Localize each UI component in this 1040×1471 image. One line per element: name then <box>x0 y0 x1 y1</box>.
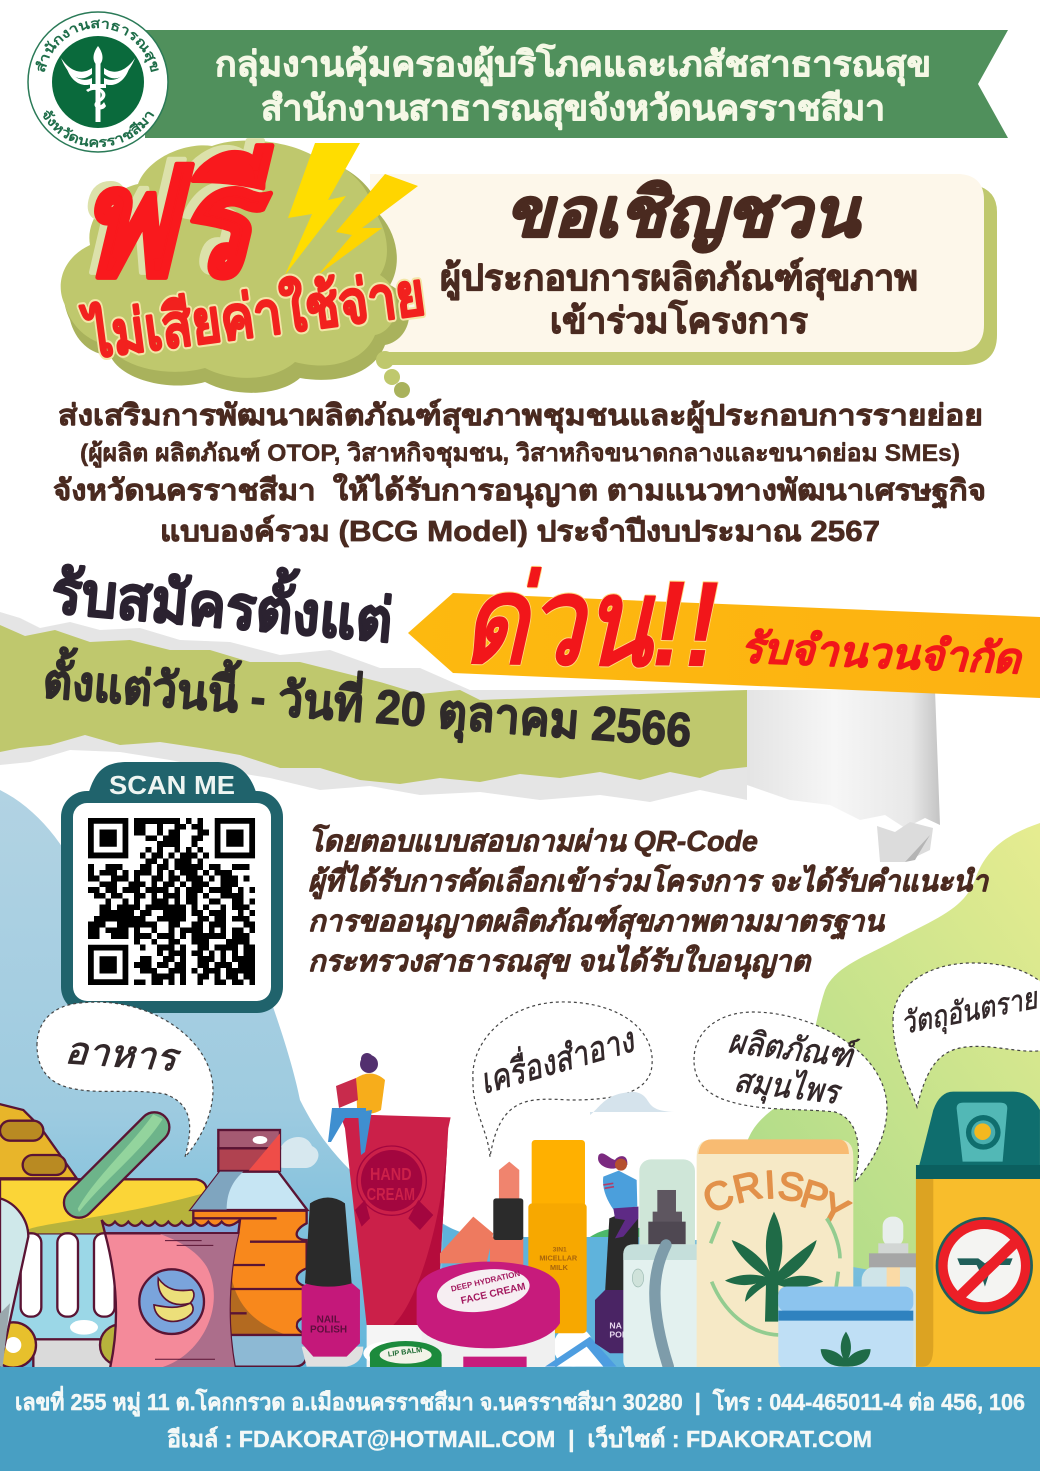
illustration: lipstick <box>440 1162 523 1277</box>
QR card <box>61 762 283 1013</box>
illustration: second product group: S <box>776 1164 807 1210</box>
logo: provincial public health office seal: จังหวัดนครราชสีมา <box>43 110 154 148</box>
illustration: products <box>0 1053 1040 1372</box>
illustration: micellar bottle: MICELLAR <box>539 1254 578 1263</box>
illustration: second product group <box>545 1139 925 1371</box>
cloud: free badge <box>61 134 429 398</box>
text block: QR instructions <box>308 824 990 980</box>
illustration: bottle <box>191 1130 307 1367</box>
illustration: hand cream tube: CREAM <box>367 1184 415 1204</box>
text block: project description: จังหวัดนครราชสีมา ให้ได้รับการอนุญาต ตามแนวทางพัฒนาเศรษฐกิจ <box>53 473 986 509</box>
invitation line 2: เข้าร่วมโครงการ <box>550 299 809 341</box>
text block: project description: แบบองค์รวม (BCG Model) ประจำปีงบประมาณ 2567 <box>160 514 880 548</box>
text block: project description <box>53 398 986 548</box>
hemp leaf <box>725 1212 823 1322</box>
text block: QR instructions: โดยตอบแบบสอบถามผ่าน QR-Code <box>308 824 758 858</box>
arrow banner: urgent <box>408 552 1040 698</box>
invitation line 1: ผู้ประกอบการผลิตภัณฑ์สุขภาพ <box>440 257 918 301</box>
illustration: hand cream tube <box>340 1114 451 1368</box>
date text: ตั้งแต่วันนี้ - วันที่ 20 ตุลาคม 2566 <box>41 645 694 761</box>
QR code <box>88 818 255 985</box>
header line 2: สำนักงานสาธารณสุขจังหวัดนครราชสีมา <box>261 89 885 130</box>
illustration: chip bag <box>102 1220 240 1368</box>
illustration: lip balm: LIP BALM <box>387 1345 423 1359</box>
scene: lake and hills <box>281 1092 672 1338</box>
icon: lightning bolt left <box>285 143 360 275</box>
torn paper: olive date band <box>0 625 747 784</box>
illustration: second product group: C <box>696 1170 740 1222</box>
free heading: ฟรี <box>74 139 273 307</box>
limited seats text: รับจำนวนจำกัด <box>740 624 1024 682</box>
seated girl <box>598 1153 627 1169</box>
illustration: nail polish: NAIL <box>317 1315 340 1326</box>
text block: project description: ส่งเสริมการพัฒนาผลิตภัณฑ์สุขภาพชุมชนและผู้ประกอบการรายย่อย <box>58 398 983 433</box>
header ribbon <box>145 30 1008 138</box>
spray bottle <box>639 1159 695 1244</box>
urgent text: ด่วน!! <box>462 552 720 692</box>
speech bubble: herbal products <box>694 1012 887 1182</box>
blue cream jar <box>778 1287 913 1370</box>
logo: provincial public health office seal: สำนักงานสาธารณสุข <box>36 20 159 72</box>
speech bubble: food <box>37 1002 213 1157</box>
illustration: nail polish <box>302 1197 363 1367</box>
illustration: second product group: I <box>763 1163 777 1207</box>
illustration: second product group: P <box>796 1172 834 1221</box>
text block: project description: (ผู้ผลิต ผลิตภัณฑ์ OTOP, วิสาหกิจชุมชน, วิสาหกิจขนาดกลางและขนาดย่อม SMEs) <box>80 439 960 469</box>
illustration: basket <box>0 1103 207 1369</box>
speech bubble: cosmetics <box>473 1002 652 1157</box>
crispy box <box>697 1140 853 1368</box>
illustration: face cream jar: FACE CREAM <box>460 1281 527 1307</box>
panel: invitation box <box>370 174 997 365</box>
illustration: micellar bottle: 3IN1 <box>553 1246 567 1253</box>
illustration: nail polish: POLISH <box>310 1325 347 1336</box>
footer contact: อีเมล์ : FDAKORAT@HOTMAIL.COM | เว็บไซต์ : FDAKORAT.COM <box>167 1424 872 1452</box>
dropper bottle <box>862 1267 916 1367</box>
illustration: face cream jar: DEEP HYDRATION <box>450 1269 521 1294</box>
illustration: second product group: POL <box>609 1329 628 1339</box>
background: green hill <box>700 823 1040 1300</box>
footer <box>0 1367 1040 1471</box>
speech bubble: herbal products: ผลิตภัณฑ์ <box>726 1022 861 1075</box>
free shadow: ฟรี <box>68 134 264 302</box>
no cost text: ไม่เสียค่าใช้จ่าย <box>78 258 429 372</box>
illustration: second product group: Y <box>812 1184 856 1235</box>
no cost outline: ไม่เสียค่าใช้จ่าย <box>78 258 429 372</box>
blue sachet <box>545 1337 617 1367</box>
text block: QR instructions: การขออนุญาตผลิตภัณฑ์สุขภาพตามมาตรฐาน <box>308 905 885 940</box>
speech bubble: food: อาหาร <box>63 1030 183 1080</box>
illustration: face cream jar <box>417 1262 560 1370</box>
speech bubble: cosmetics: เครื่องสำอาง <box>474 1015 640 1102</box>
illustration: lip balm <box>363 1341 442 1367</box>
torn paper: curl <box>747 690 940 862</box>
torn paper: grey underlay <box>0 612 747 802</box>
purple nail polish and black cap <box>605 1207 638 1293</box>
speech bubble: hazardous substances <box>893 963 1040 1107</box>
header line 1: กลุ่มงานคุ้มครองผู้บริโภคและเภสัชสาธารณสุข <box>215 43 931 86</box>
illustration: second product group: R <box>729 1163 766 1212</box>
speech bubble: herbal products: สมุนไพร <box>732 1061 845 1113</box>
heading: invitation: ขอเชิญชวน <box>505 175 862 253</box>
background: blue hill <box>0 790 1040 1367</box>
illustration: micellar bottle: MILK <box>550 1263 569 1272</box>
text block: QR instructions: กระทรวงสาธารณสุข จนได้รับใบอนุญาต <box>308 944 812 980</box>
illustration: micellar bottle <box>528 1140 593 1367</box>
icon: lightning bolt right <box>318 174 418 275</box>
illustration: reading girl on tube <box>328 1053 385 1155</box>
logo: provincial public health office seal <box>27 11 169 153</box>
illustration: hand cream tube: HAND <box>370 1164 412 1184</box>
text block: QR instructions: ผู้ที่ได้รับการคัดเลือกเข้าร่วมโครงการ จะได้รับคำแนะนำ <box>308 860 990 900</box>
heading: apply from: รับสมัครตั้งแต่ <box>49 547 396 655</box>
illustration: second product group: NA <box>609 1320 623 1330</box>
scan me label: SCAN ME <box>109 770 235 800</box>
illustration: insect spray can <box>916 1092 1040 1372</box>
